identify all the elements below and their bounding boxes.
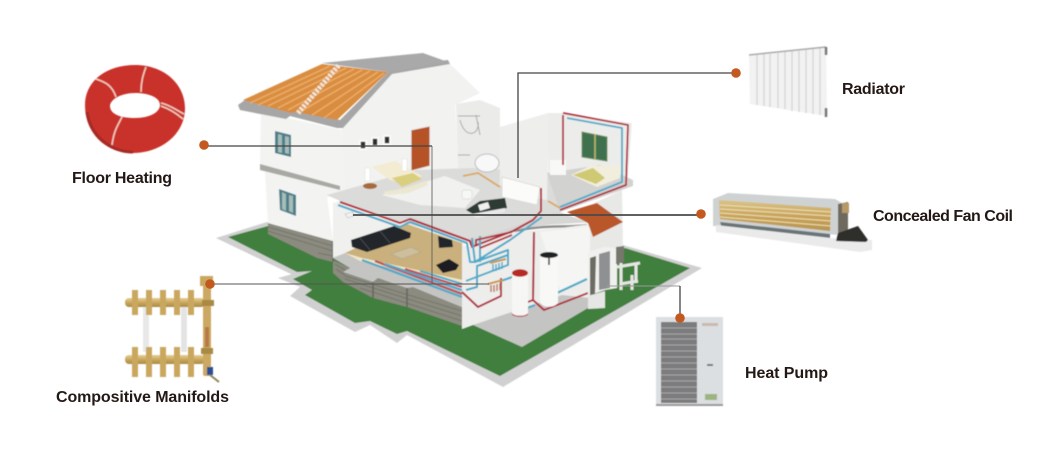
gable wall — [342, 62, 480, 195]
coffee table — [391, 247, 421, 259]
blue and red pipes — [338, 113, 628, 310]
tv and black table — [436, 236, 459, 273]
underfloor heating loops — [362, 260, 462, 297]
living room floor — [345, 224, 462, 280]
partition wall — [500, 113, 548, 200]
callout line: heat pump — [607, 286, 685, 323]
roof eave — [238, 60, 450, 128]
left bedroom bed — [363, 159, 472, 199]
bathroom room — [456, 100, 500, 172]
product: concealed fan coil — [713, 193, 872, 252]
label: radiator: Radiator — [842, 81, 905, 98]
roof ridge — [322, 53, 448, 72]
bathroom fixtures — [458, 115, 499, 172]
outdoor unit in house — [588, 246, 624, 309]
product: radiator — [749, 47, 827, 117]
floor band — [260, 164, 340, 190]
three small vents — [360, 136, 390, 149]
lower window — [279, 189, 296, 216]
house brick base — [268, 223, 462, 326]
sofa — [351, 226, 411, 252]
label: floor heating: Floor Heating — [72, 170, 172, 187]
fan coil unit in ceiling — [345, 212, 353, 218]
ground: grass — [228, 226, 690, 376]
roof tiles — [243, 64, 388, 120]
product: compositive manifolds — [125, 276, 219, 382]
callout line: floor heating — [199, 140, 432, 283]
upper left wall — [260, 112, 345, 241]
living room back wall — [333, 201, 470, 258]
callout line: compositive manifolds — [210, 283, 489, 285]
upper floor slab — [327, 168, 560, 240]
label: heat pump: Heat Pump — [745, 365, 828, 382]
white water tank — [540, 252, 558, 307]
garden fence — [617, 263, 640, 290]
red buffer tank — [512, 269, 528, 316]
awning — [567, 203, 623, 237]
right wall — [590, 190, 623, 258]
callout line: radiator — [518, 68, 741, 178]
right room wall — [548, 113, 632, 187]
utility wall — [462, 224, 590, 329]
balcony slab — [470, 212, 587, 247]
callout dot: manifolds — [205, 279, 215, 289]
right bedroom bed and window — [550, 132, 621, 187]
small manifolds in house — [488, 259, 506, 292]
light bedroom rug — [382, 176, 480, 208]
upper window — [275, 131, 291, 157]
label: compositive manifolds: Compositive Manifolds — [56, 389, 229, 406]
callout line: concealed fan coil — [353, 209, 706, 219]
radiator in house — [502, 177, 540, 205]
product: heat pump — [656, 317, 723, 406]
stoop — [333, 253, 462, 307]
lounge chair upstairs — [466, 198, 507, 218]
ground: concrete border — [216, 222, 702, 387]
utility floor — [473, 295, 590, 347]
label: concealed fan coil: Concealed Fan Coil — [873, 208, 1013, 225]
door — [411, 126, 430, 171]
product: floor heating pipe coil — [85, 65, 185, 153]
house cutaway illustration — [216, 53, 702, 387]
